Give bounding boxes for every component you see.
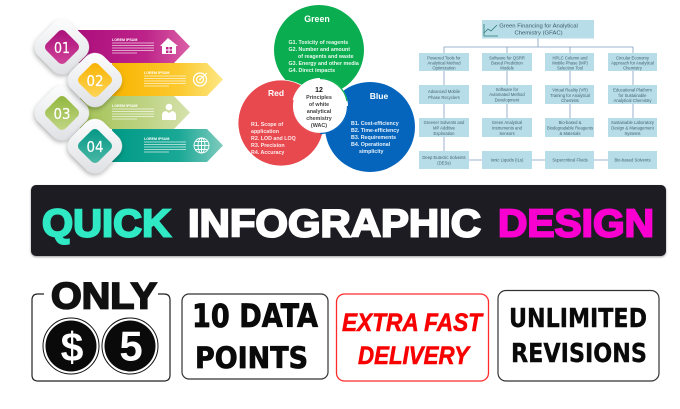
- green circle: G3. Energy and other media: [288, 61, 359, 67]
- column 2 boxes: Green Analytical: [492, 120, 522, 125]
- panel: 10 data points: [182, 294, 328, 379]
- column 3 boxes: Biodegradable Reagents: [547, 126, 593, 130]
- panel: 10 data points: 10 DATA: [192, 297, 318, 335]
- title box: Green Financing for Analytical: [499, 24, 578, 30]
- column 1 boxes: Phase Recyclers: [428, 95, 460, 100]
- column 4 boxes: Educational Platform: [613, 88, 652, 92]
- badge 02: [62, 47, 128, 113]
- centre circle: (WAC): [311, 123, 327, 129]
- red circle: application: [251, 129, 279, 135]
- green circle: G1. Toxicity of reagents: [288, 40, 348, 46]
- centre circle: [292, 78, 348, 134]
- panel: extra fast delivery: [336, 294, 488, 381]
- column 1 boxes: Optimization: [432, 66, 456, 70]
- title word: infographic: INFOGRAPHIC: [188, 202, 481, 246]
- red circle: R3. Precision: [251, 143, 285, 149]
- column 3 boxes: [545, 53, 594, 169]
- title box: Chemistry (GFAC): [514, 30, 563, 36]
- coin: dollar: $: [61, 324, 84, 370]
- column 3 boxes: Mobile Phase (MP): [552, 60, 588, 66]
- column 1 boxes: Greener Solvents and: [424, 120, 465, 125]
- panel: green financing flowchart: [419, 20, 657, 169]
- column 3 boxes: Training for Analytical: [550, 93, 590, 98]
- column 1 boxes: Analytical Method: [427, 60, 461, 66]
- blue circle: B1. Cost-efficiency: [351, 121, 399, 127]
- connectors: [444, 38, 633, 160]
- green circle: G2. Number and amount: [288, 47, 350, 53]
- blue circle: B3. Requirements: [351, 135, 396, 141]
- column 3 boxes: Chemists: [561, 98, 579, 103]
- arrow 04 teal: LOREM IPSUM: [144, 137, 169, 141]
- title box: [482, 20, 594, 38]
- centre circle: 12: [315, 87, 323, 94]
- panel: only $5: [32, 276, 170, 381]
- column 1 boxes: MP Additive: [433, 126, 456, 130]
- panel: extra fast delivery: DELIVERY: [358, 342, 471, 370]
- column 1 boxes: [419, 53, 469, 169]
- panel: unlimited revisions: UNLIMITED: [509, 304, 647, 334]
- column 1 boxes: Deep Eutectic Solvents: [422, 155, 466, 160]
- badge 03: 03: [54, 105, 70, 123]
- column 4 boxes: [608, 53, 657, 169]
- centre circle: chemistry: [306, 116, 332, 122]
- column 1 boxes: Exploration: [434, 131, 455, 136]
- panel: extra fast delivery: EXTRA FAST: [342, 309, 484, 337]
- column 3 boxes: Bio-based &: [559, 120, 582, 125]
- column 2 boxes: Software for QSRR: [489, 56, 525, 60]
- red circle: R4. Accuracy: [251, 150, 284, 156]
- red circle: [238, 80, 324, 166]
- column 3 boxes: Selection Tool: [557, 66, 583, 70]
- blue circle: B2. Time-efficiency: [351, 128, 399, 134]
- arrow 01 magenta: LOREM IPSUM: [112, 38, 137, 42]
- column 2 boxes: Sensors: [499, 131, 515, 136]
- column 4 boxes: Sustainable Laboratory: [611, 120, 655, 125]
- coin: five: 5: [119, 322, 143, 370]
- green circle: Green: [304, 14, 330, 24]
- panel: white analytical chemistry circles: [238, 5, 415, 172]
- red circle: Red: [268, 88, 284, 98]
- arrow 01 magenta: [78, 30, 190, 63]
- blue circle: B4. Operational: [351, 142, 391, 148]
- icon: target: [194, 73, 207, 86]
- panel: 10 data points: POINTS: [195, 341, 308, 375]
- column 3 boxes: & Materials: [560, 131, 580, 136]
- panel: unlimited revisions: [498, 290, 659, 381]
- green circle: G4. Direct impacts: [288, 68, 335, 74]
- column 4 boxes: Design & Management: [611, 126, 655, 130]
- badge 01: 01: [54, 39, 70, 57]
- column 4 boxes: Chemistry: [623, 66, 643, 70]
- green circle: of reagents and waste: [298, 54, 354, 60]
- green circle: [274, 5, 364, 95]
- column 1 boxes: (DESs): [437, 160, 451, 166]
- icon: globe: [194, 138, 209, 153]
- badge 02: 02: [86, 72, 104, 90]
- badge 04: 04: [86, 138, 104, 156]
- heading: only: ONLY: [51, 276, 157, 316]
- title banner: [31, 185, 666, 256]
- column 4 boxes: Circular Economy: [616, 56, 650, 60]
- column 3 boxes: HPLC Column and: [553, 56, 588, 60]
- blue circle: simplicity: [359, 149, 383, 155]
- icon: person: [162, 104, 176, 120]
- column 1 boxes: Advanced Mobile: [428, 89, 461, 94]
- centre circle: analytical: [307, 109, 332, 115]
- badge 01: [29, 14, 95, 80]
- column 3 boxes: Supercritical Fluids: [552, 158, 588, 162]
- centre circle: of white: [309, 102, 329, 108]
- column 4 boxes: Bio-based Solvents: [614, 158, 651, 162]
- column 3 boxes: Virtual Reality (VR): [552, 88, 588, 92]
- column 4 boxes: Systems: [624, 131, 641, 136]
- arrow 04 teal: [112, 129, 223, 162]
- column 2 boxes: Models: [500, 66, 514, 70]
- arrow 03 green: LOREM IPSUM: [112, 104, 137, 108]
- badge 04: [62, 113, 128, 179]
- arrow 02 yellow: LOREM IPSUM: [144, 71, 169, 75]
- arrow 02 yellow: [112, 63, 223, 96]
- column 2 boxes: Development: [495, 98, 520, 102]
- red circle: R1. Scope of: [251, 122, 283, 128]
- column 2 boxes: Software for: [496, 87, 519, 92]
- red circle: R2. LOD and LOQ: [251, 136, 296, 142]
- arrow 03 green: [80, 96, 190, 129]
- column 1 boxes: Powered Tools for: [427, 56, 461, 60]
- panel: unlimited revisions: REVISIONS: [511, 339, 647, 369]
- column 2 boxes: [482, 53, 532, 169]
- blue circle: [325, 82, 415, 172]
- centre circle: Principles: [306, 95, 332, 101]
- title word: design: DESIGN: [498, 202, 654, 246]
- column 2 boxes: Automated Method: [489, 92, 525, 97]
- title word: quick: QUICK: [42, 202, 171, 246]
- badge 03: [29, 80, 95, 146]
- column 2 boxes: Instruments and: [492, 126, 523, 130]
- icon: house: [160, 38, 178, 54]
- column 4 boxes: for Sustainable: [619, 93, 647, 98]
- column 4 boxes: Analytical Chemistry: [614, 98, 652, 103]
- blue circle: Blue: [370, 91, 388, 101]
- panel: numbered arrow infographic: [29, 14, 223, 179]
- column 4 boxes: Approach for Analytical: [611, 60, 654, 66]
- column 2 boxes: Based Prediction: [491, 60, 523, 66]
- column 2 boxes: Ionic Liquids (ILs): [491, 158, 524, 162]
